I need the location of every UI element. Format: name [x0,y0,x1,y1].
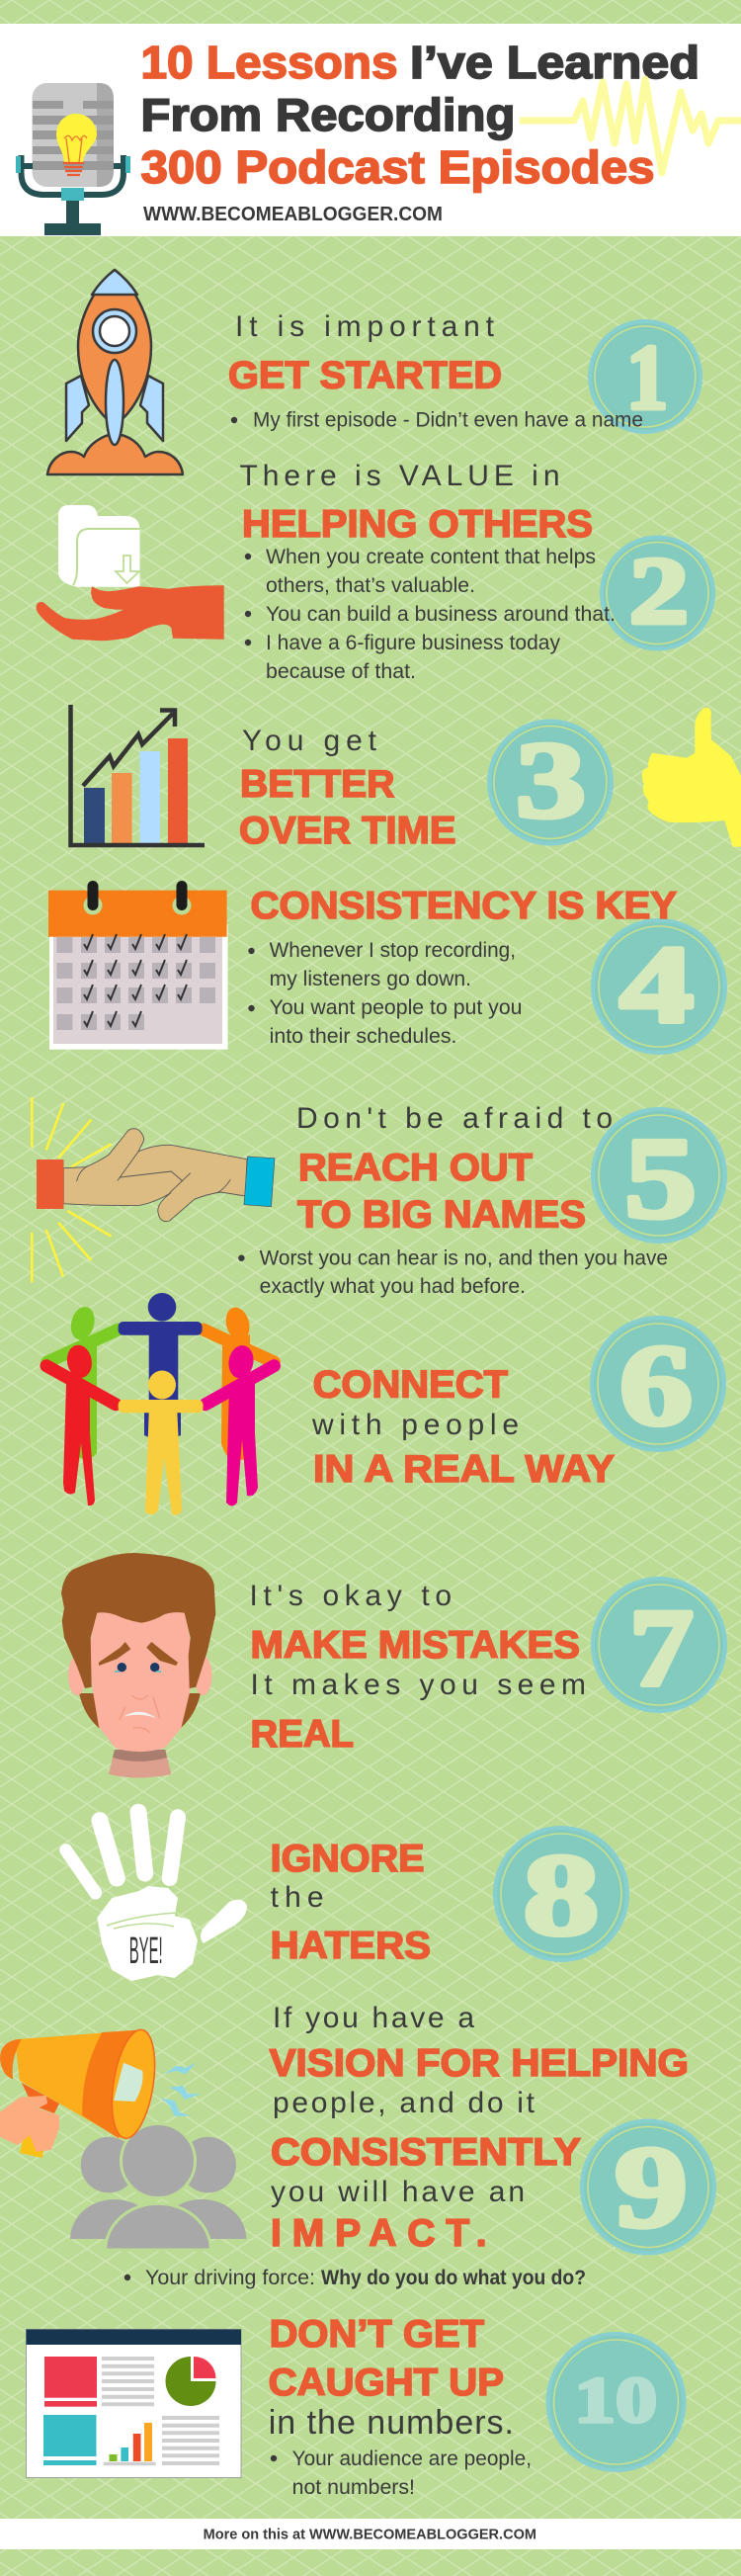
heading: ignore the haters [271,1838,431,1967]
heading: vision for helping: CONSISTENTLY [271,2131,581,2174]
heading: connect with people in a real way: CONNECT [313,1363,508,1406]
heading: don't get caught up [269,2313,514,2442]
bullet list: because of that. [266,660,416,683]
heading: vision for helping: you will have an [271,2176,525,2208]
badge: number 3: 3 [516,720,586,840]
title: 300 Podcast Episodes [140,141,654,193]
heading: make mistakes [249,1580,586,1756]
badge: number 2 [602,538,713,648]
lesson 3 [71,705,741,852]
heading: connect with people in a real way [311,1363,615,1491]
heading: vision for helping: people, and do it [273,2087,535,2119]
lesson 9 [0,2002,714,2289]
heading: get started: GET STARTED [228,355,502,397]
bullet list: Your audience are people, [292,2447,532,2470]
bullet [238,1246,668,1298]
heading: vision for helping: If you have a [273,2002,474,2034]
bullet list: into their schedules. [270,1025,456,1048]
badge: number 7 [593,1579,725,1711]
lesson 5 [32,1097,725,1298]
badge: number 3 [489,720,612,844]
bullet: My first episode - Didn’t even have a name [253,409,643,432]
badge: number 4: 4 [619,923,694,1046]
bullet [124,2267,586,2289]
icon: hand holding folder [37,505,224,641]
bullet list: When you create content that helps [266,546,596,568]
heading: get started [228,310,502,397]
badge: number 10 [547,2334,684,2470]
bullet list: I have a 6-figure business today [266,632,560,654]
icon: circle of people [46,1293,274,1515]
icon: audience [70,2123,246,2250]
badge: number 8 [495,1828,627,1960]
title [140,37,700,193]
heading: better over time: You get [242,725,377,757]
icon: microphone with light bulb [16,83,130,235]
bullet list [248,939,523,1048]
icon: handshake with rays [32,1097,275,1282]
bullet: exactly what you had before. [260,1275,526,1298]
heading: better over time: OVER TIME [239,810,456,852]
website url: WWW.BECOMEABLOGGER.COM [143,204,443,225]
heading: helping others: There is VALUE in [239,460,559,492]
heading: don't get caught up: in the numbers. [269,2404,514,2442]
bullet list: Whenever I stop recording, [270,939,516,962]
badge: number 1: 1 [626,327,668,429]
heading: get started: It is important [235,310,495,343]
badge: number 6 [592,1318,724,1450]
bullet list: You want people to put you [270,996,522,1019]
icon: megaphone with hand [0,2026,202,2158]
bullet list: You can build a business around that. [266,603,616,626]
title: From Recording [140,89,516,140]
lesson 1 [47,270,700,474]
sound waves [161,2063,202,2116]
heading: helping others: HELPING OTHERS [242,503,593,546]
heading: vision for helping [270,2002,689,2255]
icon: analytics dashboard [26,2329,241,2477]
badge: number 2: 2 [629,538,689,644]
bullet list [245,546,616,683]
heading: don't get caught up: CAUGHT UP [269,2361,504,2404]
bullet: Your driving force: [145,2267,315,2289]
icon: rising bar chart [71,705,205,845]
icon: thumbs up [642,708,741,847]
badge: number 6: 6 [619,1323,693,1449]
heading: make mistakes: REAL [251,1713,354,1756]
heading: connect with people in a real way: IN A REAL WAY [313,1448,615,1491]
badge: number 7: 7 [629,1588,694,1710]
lesson 7 [61,1553,725,1777]
heading: better over time: BETTER [240,763,395,806]
icon: white hand saying bye: BYE! [129,1931,163,1972]
waveform [520,79,741,173]
bullet list: not numbers! [292,2476,415,2499]
title: 10 Lessons [140,37,397,88]
heading: better over time [239,725,456,852]
heading: reach out to big names: TO BIG NAMES [297,1194,586,1237]
heading: make mistakes: It's okay to [249,1580,452,1612]
badge: number 10: 10 [574,2364,657,2437]
heading: make mistakes: It makes you seem [251,1669,586,1701]
heading: don't get caught up: DON’T GET [270,2313,484,2356]
heading: ignore the haters: the [271,1881,324,1914]
lesson 8 [66,1812,627,1981]
bullet list: my listeners go down. [270,968,471,990]
footer band: More on this at WWW.BECOMEABLOGGER.COM [204,2527,536,2542]
lesson 10 [26,2313,684,2499]
icon: calendar with checks [48,881,227,1050]
heading: reach out to big names [296,1102,613,1237]
badge: number 8: 8 [524,1831,599,1959]
bullet: Why do you do what you do? [321,2267,586,2289]
badge: number 4 [593,920,725,1053]
heading: vision for helping: IMPACT. [271,2212,487,2255]
bullet list [271,2447,532,2499]
heading: consistency is key: CONSISTENCY IS KEY [251,885,677,927]
icon: rocket [47,270,183,474]
title: I’ve Learned [410,37,700,88]
heading: ignore the haters: HATERS [271,1925,431,1967]
badge: number 9 [582,2121,714,2254]
heading: connect with people in a real way: with people [311,1409,519,1441]
badge: number 1 [590,321,700,432]
heading: helping others [239,460,593,546]
lesson 2 [37,460,713,683]
heading: reach out to big names: REACH OUT [298,1147,533,1189]
badge: number 5: 5 [624,1115,697,1243]
heading: ignore the haters: IGNORE [271,1838,425,1880]
header banner [0,24,741,236]
icon: sad face [61,1553,215,1777]
badge: number 9: 9 [615,2122,688,2252]
lesson 6 [46,1293,724,1515]
heading: make mistakes: MAKE MISTAKES [251,1624,580,1667]
bullet list: others, that’s valuable. [266,574,475,597]
footer band [0,2519,741,2549]
lesson 4 [48,881,725,1053]
heading: vision for helping: VISION FOR HELPING [270,2042,689,2085]
bullet: Worst you can hear is no, and then you have [260,1246,668,1269]
icon: white hand saying bye [66,1812,247,1981]
heading: reach out to big names: Don't be afraid to [296,1102,613,1135]
badge: number 5 [593,1109,725,1243]
